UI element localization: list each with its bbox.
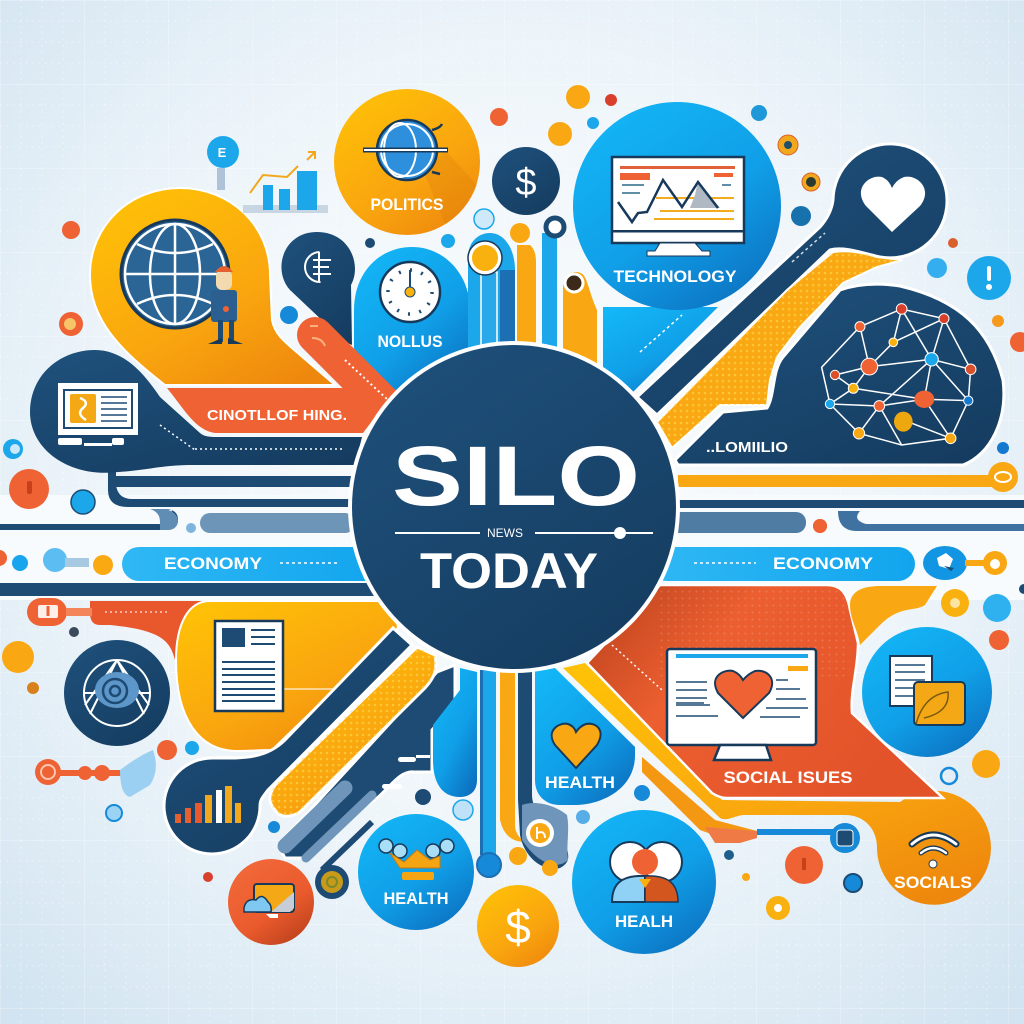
- icon: dollar coin: $: [505, 901, 531, 953]
- panel: health heart: [535, 668, 635, 805]
- icon: E badge: [207, 136, 239, 190]
- panel: yellow ribbon: [657, 251, 902, 448]
- panel: navy bands bottom left: [278, 665, 455, 870]
- icon: globe: [121, 220, 229, 328]
- horizontal connector lines left: [0, 470, 375, 596]
- subtitle line: [395, 526, 653, 540]
- panel: nollus: NOLLUS: [378, 333, 442, 351]
- panel: health people: [572, 810, 716, 954]
- icon: bars: [175, 786, 241, 823]
- panel: health crown: [358, 814, 474, 930]
- icon: newspaper: [215, 621, 283, 711]
- subtitle: TODAY: [420, 543, 598, 599]
- panel: health heart: HEALTH: [545, 774, 615, 792]
- panel: bar chart arm: [164, 628, 412, 854]
- panel: yellow diagonal band: [270, 647, 436, 816]
- panel: monitor bubble: [30, 350, 362, 473]
- icon: dollar coin: [477, 885, 559, 967]
- panel: bottom tubes: [433, 668, 568, 877]
- panel: politics badge: POLITICS: [370, 195, 444, 214]
- panel: politics badge: [334, 89, 480, 235]
- icon: dollar badge: $: [515, 162, 537, 204]
- icon: document badge: [862, 627, 992, 757]
- icon: monitor heart: [667, 649, 816, 760]
- panel: tube connectors top: [468, 218, 597, 365]
- icon: globe: [363, 120, 448, 180]
- icon: person: [208, 266, 243, 344]
- title: SILO: [392, 429, 640, 523]
- economy bar right: [650, 547, 915, 581]
- connector: red pin: [35, 750, 156, 797]
- connector icon right: [923, 546, 1007, 580]
- central badge: [348, 341, 680, 673]
- icon: wifi: [912, 835, 956, 868]
- horizontal connector lines right: [670, 462, 1024, 533]
- icon: bar chart top left: [243, 152, 328, 213]
- subtitle line: NEWS: [487, 526, 523, 540]
- icon: clock: [380, 262, 440, 322]
- icon: euro pin: [281, 232, 355, 345]
- economy bar left: ECONOMY: [164, 554, 263, 573]
- icon: yellow ring node: [315, 865, 349, 899]
- icon: computer monitor: [58, 383, 138, 446]
- economy bar left: [122, 547, 382, 581]
- panel: social issues: SOCIAL ISUES: [724, 768, 852, 787]
- icon: alert badge: [967, 256, 1011, 300]
- icon: E badge: E: [218, 145, 227, 160]
- icon: dollar badge: [492, 147, 560, 215]
- icon: people: [610, 842, 682, 902]
- panel: globe speech bubble: [90, 188, 335, 385]
- economy bar right: ECONOMY: [773, 554, 874, 573]
- panel: red label: CINOTLLOF HING.: [207, 407, 347, 424]
- panel: yellow fragment: [850, 586, 937, 645]
- panel: technology: TECHNOLOGY: [614, 267, 737, 286]
- connector: blue line with chip: [757, 823, 860, 853]
- panel: health crown: HEALTH: [384, 890, 448, 908]
- panel: nollus: [354, 247, 470, 400]
- icon: globe target badge: [64, 640, 170, 746]
- panel: orange socials: SOCIALS: [894, 873, 972, 892]
- panel: technology: [573, 102, 781, 392]
- panel: network: [675, 284, 1004, 465]
- panel: orange socials: [563, 663, 991, 905]
- icon: crown: [379, 839, 454, 880]
- panel: red pill: [310, 326, 400, 420]
- panel: red tab left: [27, 598, 205, 660]
- panel: social issues: [587, 585, 943, 798]
- panel: heart arm: [637, 144, 947, 415]
- icon: monitor badge: [228, 859, 314, 945]
- icon: monitor chart: [612, 157, 744, 256]
- panel: health people: HEALH: [615, 913, 673, 931]
- icon: network graph: [822, 304, 976, 445]
- panel: network: ..LOMIILIO: [706, 440, 788, 456]
- connector dots left: [0, 548, 113, 575]
- panel: red label: [167, 388, 375, 433]
- panel: newspaper: [176, 601, 398, 751]
